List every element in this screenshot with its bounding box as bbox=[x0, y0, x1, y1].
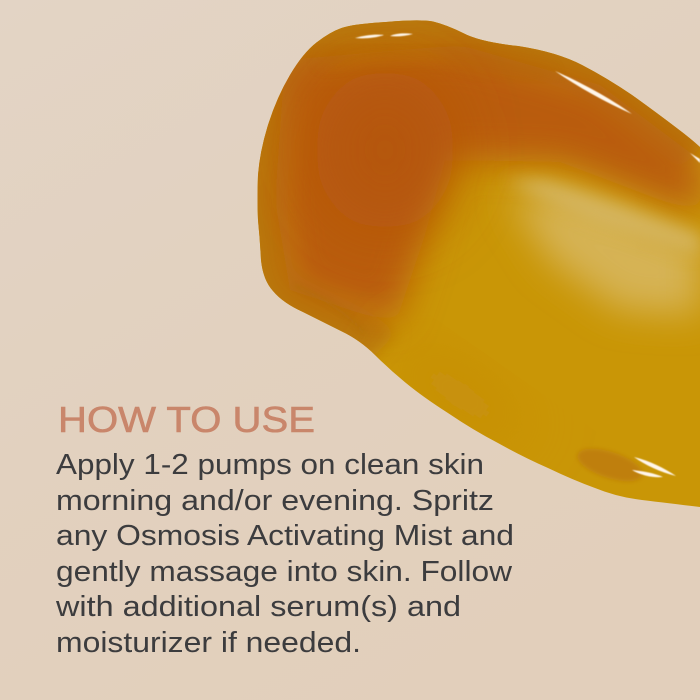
heading: HOW TO USE bbox=[58, 399, 315, 440]
lower-right drop shading bbox=[577, 448, 642, 482]
inner rim lines bbox=[322, 51, 550, 76]
instructions text: any Osmosis Activating Mist and bbox=[56, 520, 514, 552]
instructions text bbox=[55, 449, 514, 659]
pale golden centre bbox=[510, 195, 700, 315]
instructions text: gently massage into skin. Follow bbox=[56, 556, 513, 588]
amber rim tone bbox=[258, 20, 700, 355]
instructions text: Apply 1-2 pumps on clean skin bbox=[56, 449, 484, 481]
dark amber upper region bbox=[275, 45, 700, 325]
pale highlight bbox=[505, 180, 700, 255]
instructions text: moisturizer if needed. bbox=[56, 627, 361, 659]
orange tint at lower edge bbox=[392, 370, 514, 452]
instructions text: morning and/or evening. Spritz bbox=[56, 485, 494, 517]
instructions text: with additional serum(s) and bbox=[55, 591, 461, 623]
lower-left drop fold bbox=[295, 286, 364, 334]
serum swatch bbox=[240, 0, 700, 520]
specular highlights bbox=[355, 33, 700, 477]
deepest amber core bbox=[410, 148, 478, 238]
